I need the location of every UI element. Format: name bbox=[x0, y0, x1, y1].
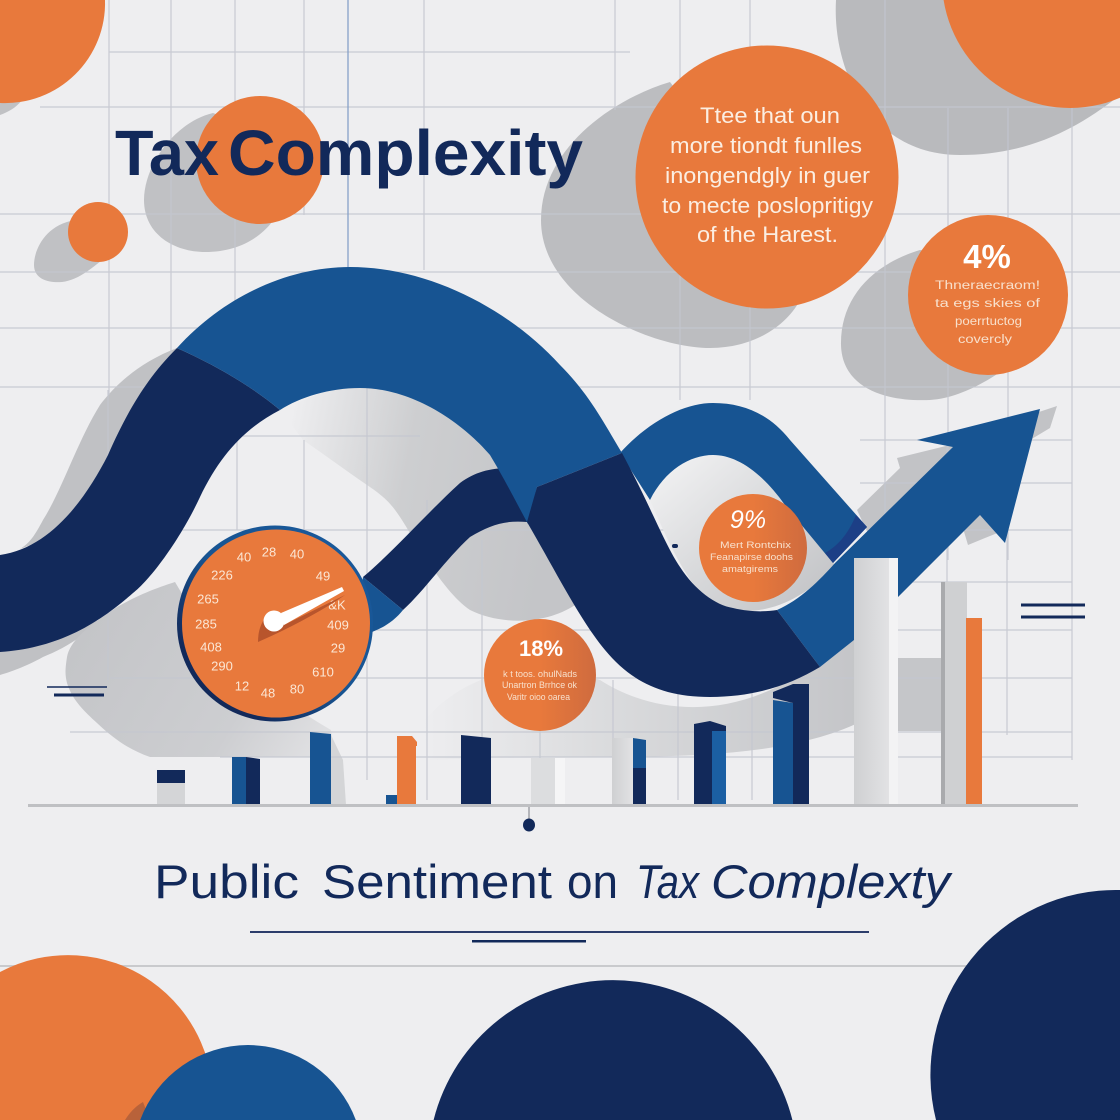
subtitle: on bbox=[567, 855, 618, 908]
bottom circle: blue bbox=[140, 1045, 356, 1120]
callout: 18% circle: 18% bbox=[519, 636, 563, 661]
callout: 4% circle: ta egs skies of bbox=[935, 298, 1041, 310]
gray block behind bars bbox=[898, 658, 941, 731]
subtitle underlines bbox=[250, 931, 869, 942]
main ribbon: navy section bbox=[0, 348, 280, 652]
gauge tick labels bbox=[195, 544, 349, 700]
callout: large orange circle: to mecte poslopritigy bbox=[662, 193, 874, 218]
main ribbon: blue section bbox=[177, 267, 622, 524]
callout: 9% circle: 9% bbox=[730, 506, 766, 534]
blue loop ribbon bbox=[620, 403, 867, 563]
subtitle: Complexty bbox=[711, 855, 953, 908]
callout: large orange circle: Ttee that oun bbox=[700, 103, 840, 128]
hollow shading inside loop bbox=[650, 456, 835, 611]
callout: 4% circle: 4% bbox=[963, 238, 1011, 275]
footer divider bbox=[0, 965, 1120, 967]
gauge tick labels: 28 bbox=[262, 544, 276, 559]
gauge tick labels: 12 bbox=[235, 678, 249, 693]
blue ribbon stub behind gauge bbox=[360, 577, 403, 632]
callout: 9% circle: Mert Rontchix bbox=[720, 540, 791, 551]
thin blue vertical bbox=[347, 0, 349, 270]
line pair: left bbox=[47, 687, 107, 695]
callout: 9% circle: Feanapirse doohs bbox=[710, 552, 793, 563]
background grid bbox=[0, 0, 1120, 800]
marker dot bbox=[523, 807, 535, 832]
gauge tick labels: 40 bbox=[237, 549, 251, 564]
callout: 18% circle: Varitr oioo oarea bbox=[507, 692, 570, 702]
bar chart bbox=[28, 558, 1078, 807]
gauge needle shadow bbox=[258, 595, 345, 642]
gauge tick labels: 226 bbox=[211, 567, 233, 582]
gray shadow blobs bbox=[0, 0, 1120, 805]
main ribbon: lower navy section bbox=[527, 453, 820, 697]
gauge tick labels: 610 bbox=[312, 664, 334, 679]
callout: 4% circle bbox=[908, 215, 1068, 375]
subtitle bbox=[154, 855, 953, 908]
bottom circle: navy centre bbox=[434, 980, 792, 1120]
callout: 9% circle: amatgirems bbox=[722, 564, 778, 575]
second navy ribbon bbox=[363, 468, 540, 610]
bottom circle: orange bbox=[0, 955, 213, 1120]
gauge tick labels: 285 bbox=[195, 616, 217, 631]
callout: 18% circle bbox=[484, 619, 596, 731]
small accent circle bbox=[68, 202, 128, 262]
subtitle: Tax bbox=[636, 855, 700, 908]
gauge bbox=[177, 526, 373, 722]
loop shade band bbox=[825, 515, 867, 563]
callout: 4% circle: poerrtuctog bbox=[955, 316, 1022, 328]
callout: 18% circle: Unartron Brrhce ok bbox=[502, 680, 577, 690]
gauge tick labels: 408 bbox=[200, 639, 222, 654]
callout: large orange circle: of the Harest. bbox=[697, 222, 838, 247]
arrow shadow bbox=[857, 406, 1057, 597]
corner circle: top left bbox=[0, 0, 105, 103]
callout: 4% circle: covercly bbox=[958, 334, 1012, 346]
gauge tick labels: &K bbox=[328, 597, 346, 612]
line pair: right bbox=[1021, 605, 1085, 617]
callout: large orange circle: more tiondt funlles bbox=[670, 133, 862, 158]
soft swoosh under arch bbox=[280, 385, 575, 621]
callout: 18% circle: k t toos. ohulNads bbox=[503, 669, 578, 679]
callout: large orange circle: inongendgly in guer bbox=[665, 163, 871, 188]
bottom circle overlap shade bbox=[125, 1102, 150, 1120]
gauge tick labels: 290 bbox=[211, 658, 233, 673]
gauge tick labels: 40 bbox=[290, 546, 304, 561]
gauge needle bbox=[281, 587, 344, 625]
subtitle: Public bbox=[154, 855, 299, 908]
gauge tick labels: 409 bbox=[327, 617, 349, 632]
subtitle: Sentiment bbox=[322, 855, 552, 908]
callout: 4% circle: Thneraecraom! bbox=[935, 280, 1040, 292]
small dot bbox=[672, 544, 678, 548]
gauge tick labels: 48 bbox=[261, 685, 275, 700]
chart axis bbox=[28, 804, 1078, 807]
bottom circle: navy right bbox=[930, 890, 1120, 1120]
title: Tax bbox=[115, 117, 219, 189]
gauge tick labels: 49 bbox=[316, 568, 330, 583]
soft swoosh low bbox=[420, 630, 860, 760]
gauge tick labels: 29 bbox=[331, 640, 345, 655]
title accent circle bbox=[196, 96, 324, 224]
callout: large orange circle bbox=[636, 46, 898, 308]
gauge tick labels: 80 bbox=[290, 681, 304, 696]
arrow bbox=[777, 409, 1040, 667]
title: Complexity bbox=[228, 117, 583, 189]
gauge tick labels: 265 bbox=[197, 591, 219, 606]
corner circle: top right bbox=[944, 0, 1120, 108]
callout: 9% circle bbox=[699, 494, 807, 602]
